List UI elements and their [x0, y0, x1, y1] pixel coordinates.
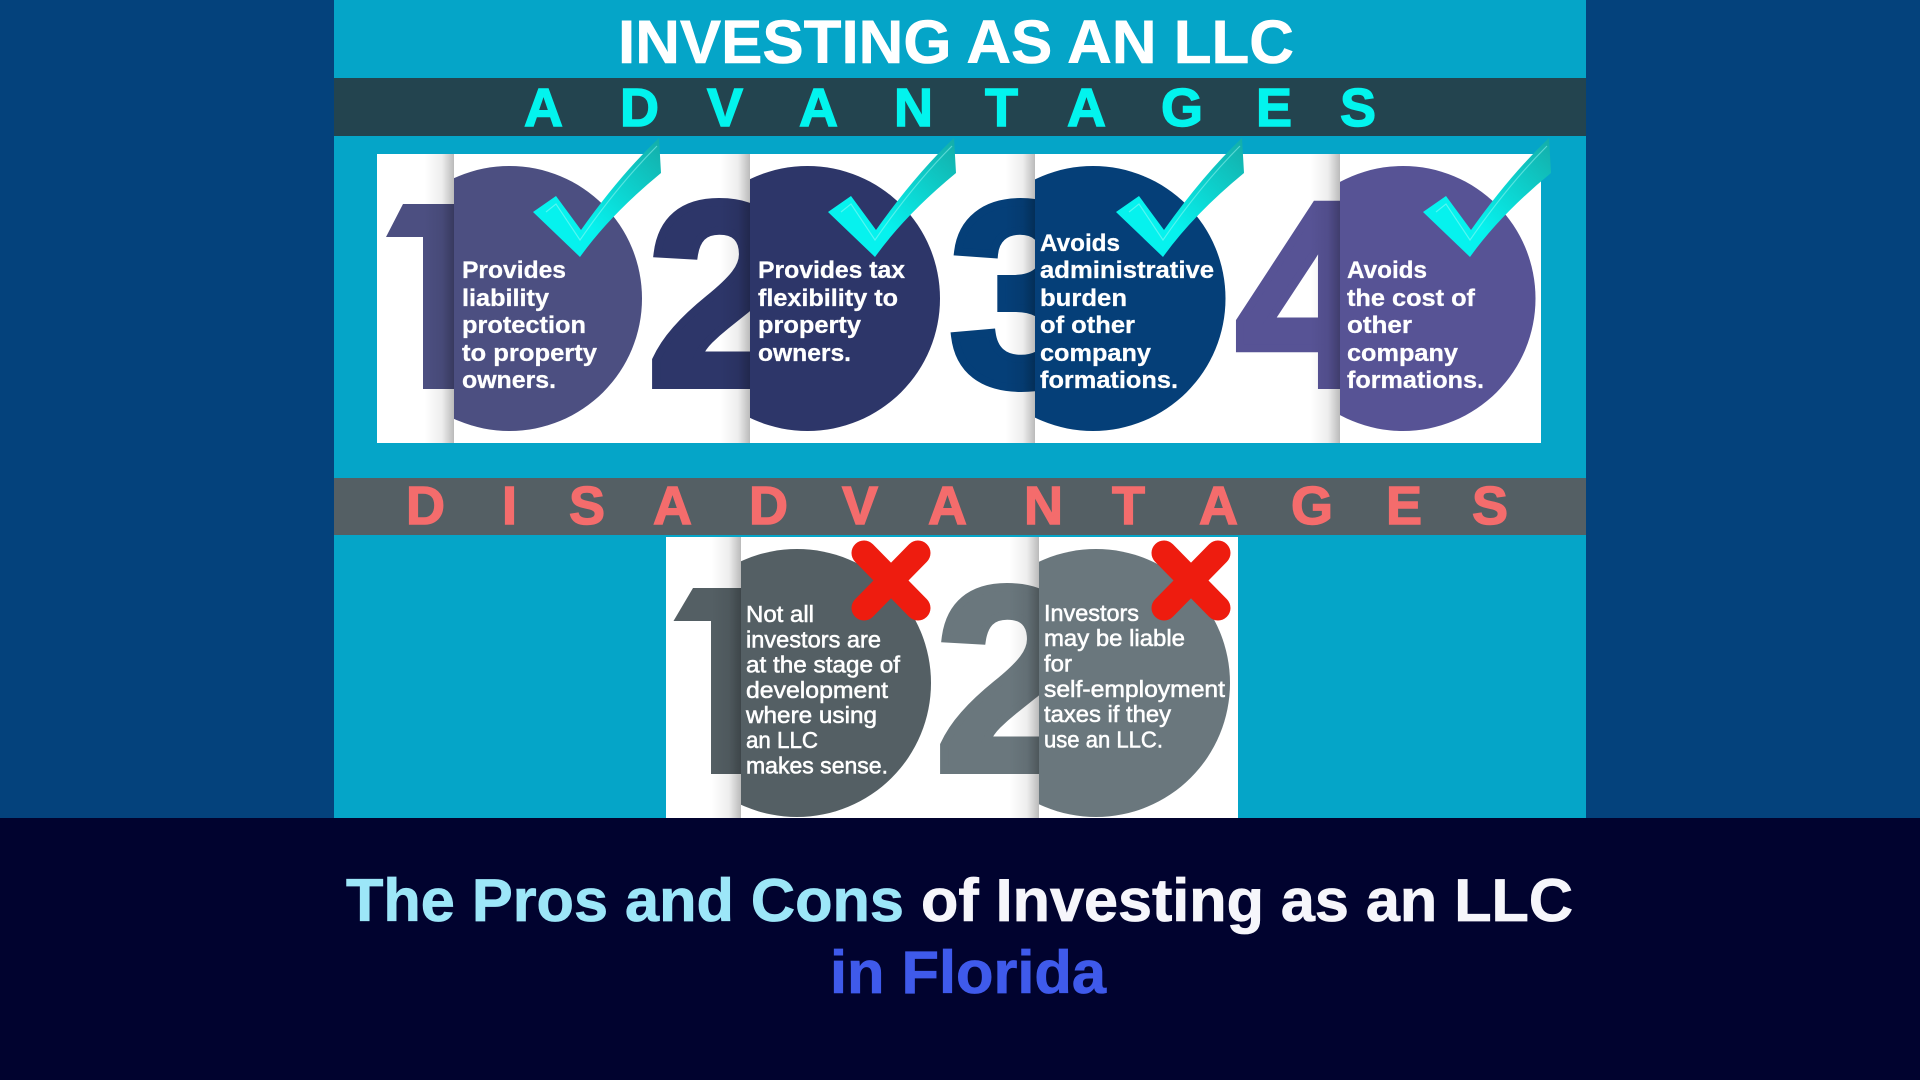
disadvantage card 1: Not all [746, 601, 814, 627]
card 2: 2 [647, 148, 793, 441]
icon: red cross [1164, 553, 1218, 608]
background [0, 0, 1920, 818]
disadvantage card 1: development [746, 677, 889, 703]
disadvantage card 2: 2 [935, 533, 1081, 826]
card 4: formations. [1347, 367, 1484, 394]
card 3: 3 [949, 148, 1095, 441]
disadvantage card 2: use an LLC. [1044, 726, 1163, 752]
panel: disadvantages cards [663, 533, 1238, 826]
disadvantage card 1: investors are [746, 626, 881, 652]
card 2: Provides tax [758, 257, 906, 284]
card 1: protection [462, 312, 586, 339]
card 4: Avoids [1347, 257, 1427, 284]
card 1: 1 [378, 159, 517, 438]
icon: red cross [864, 553, 918, 608]
disadvantage card 2: Investors [1044, 600, 1139, 626]
card 3: burden [1040, 285, 1127, 312]
card 3: Avoids [1040, 230, 1120, 257]
footer title line 1: of Investing as an LLC [921, 867, 1573, 934]
card 2: owners. [758, 340, 851, 367]
card 1: owners. [462, 367, 556, 394]
disadvantage card 1: 1 [666, 544, 805, 823]
disadvantage card 1: makes sense. [746, 752, 888, 778]
card 1: Provides [462, 257, 566, 284]
title: INVESTING AS AN LLC [618, 8, 1294, 76]
disadvantage card 2: for [1044, 650, 1072, 676]
footer title line 1 [346, 867, 1573, 934]
card 4: company [1347, 340, 1459, 367]
disadvantage card 1 [663, 537, 931, 823]
card 4: the cost of [1347, 285, 1476, 312]
card 1: liability [462, 285, 550, 312]
heading band: advantages [334, 78, 1586, 138]
disadvantage card 1: at the stage of [746, 652, 901, 678]
panel: infographic [334, 0, 1586, 826]
heading band: advantages: ADVANTAGES [524, 78, 1376, 138]
card 2: property [758, 312, 862, 339]
card 4 [1236, 138, 1551, 443]
footer [0, 818, 1920, 1080]
disadvantage card 2 [935, 533, 1230, 826]
card 2 [647, 138, 956, 443]
card 3 [949, 138, 1244, 443]
card 3: formations. [1040, 367, 1178, 394]
heading band: disadvantages: DISADVANTAGES [406, 476, 1508, 536]
footer title line 1: The Pros and Cons [346, 867, 904, 934]
disadvantage card 1: where using [745, 702, 877, 728]
card 4: 4 [1236, 148, 1383, 441]
footer title line 2: in Florida [830, 939, 1107, 1006]
card 3: company [1040, 340, 1152, 367]
panel: advantages cards [377, 138, 1551, 443]
card 1 [377, 138, 661, 443]
disadvantage card 1: an LLC [746, 727, 818, 753]
card 1: to property [462, 340, 598, 367]
card 2: flexibility to [758, 285, 898, 312]
card 3: of other [1040, 312, 1135, 339]
disadvantage card 2: self-employment [1044, 676, 1226, 702]
disadvantage card 2: taxes if they [1044, 701, 1172, 727]
disadvantage card 2: may be liable [1044, 625, 1185, 651]
card 4: other [1347, 312, 1412, 339]
card 3: administrative [1040, 257, 1214, 284]
